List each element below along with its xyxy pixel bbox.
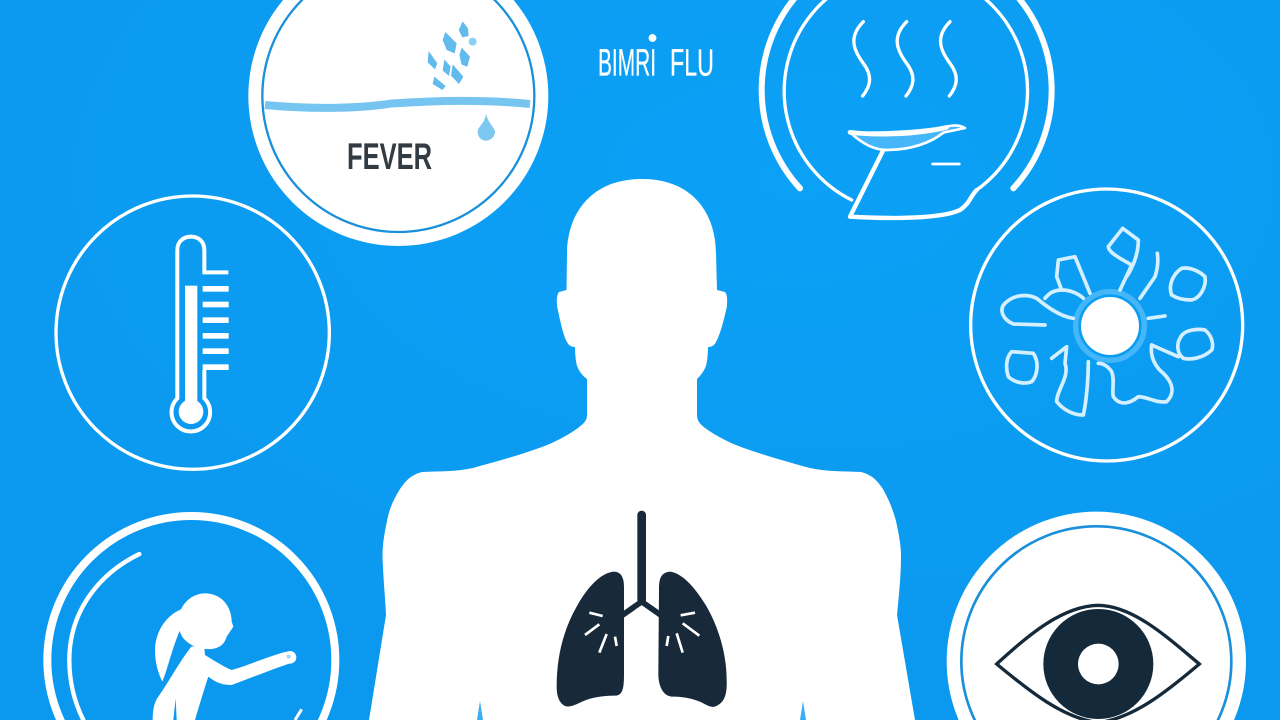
chin outline xyxy=(850,150,977,218)
lungs xyxy=(557,515,727,707)
girl silhouette xyxy=(153,593,296,720)
title: BIMRI xyxy=(598,42,656,84)
circle: virus icon xyxy=(971,189,1243,461)
bronchi ticks xyxy=(585,613,699,653)
iris and pupil xyxy=(1043,609,1153,719)
circle: steaming bowl icon xyxy=(762,0,1052,218)
ice shards xyxy=(428,21,477,90)
circle: running girl icon xyxy=(47,516,335,720)
title: FLU xyxy=(670,42,714,84)
arm gaps xyxy=(477,701,806,720)
water line xyxy=(265,101,530,108)
thermometer outline xyxy=(171,237,228,432)
eye outline xyxy=(997,605,1199,720)
scale ticks xyxy=(179,286,229,424)
circle: eye icon xyxy=(947,512,1246,720)
mercury xyxy=(185,286,197,409)
body silhouette xyxy=(369,179,915,720)
water drop xyxy=(478,114,495,141)
bowl xyxy=(850,126,965,150)
fever label: FEVER xyxy=(347,136,432,177)
nucleus xyxy=(1076,292,1144,360)
circle: fever icon xyxy=(248,0,548,246)
circle: thermometer icon xyxy=(56,196,329,469)
steam xyxy=(854,22,870,96)
